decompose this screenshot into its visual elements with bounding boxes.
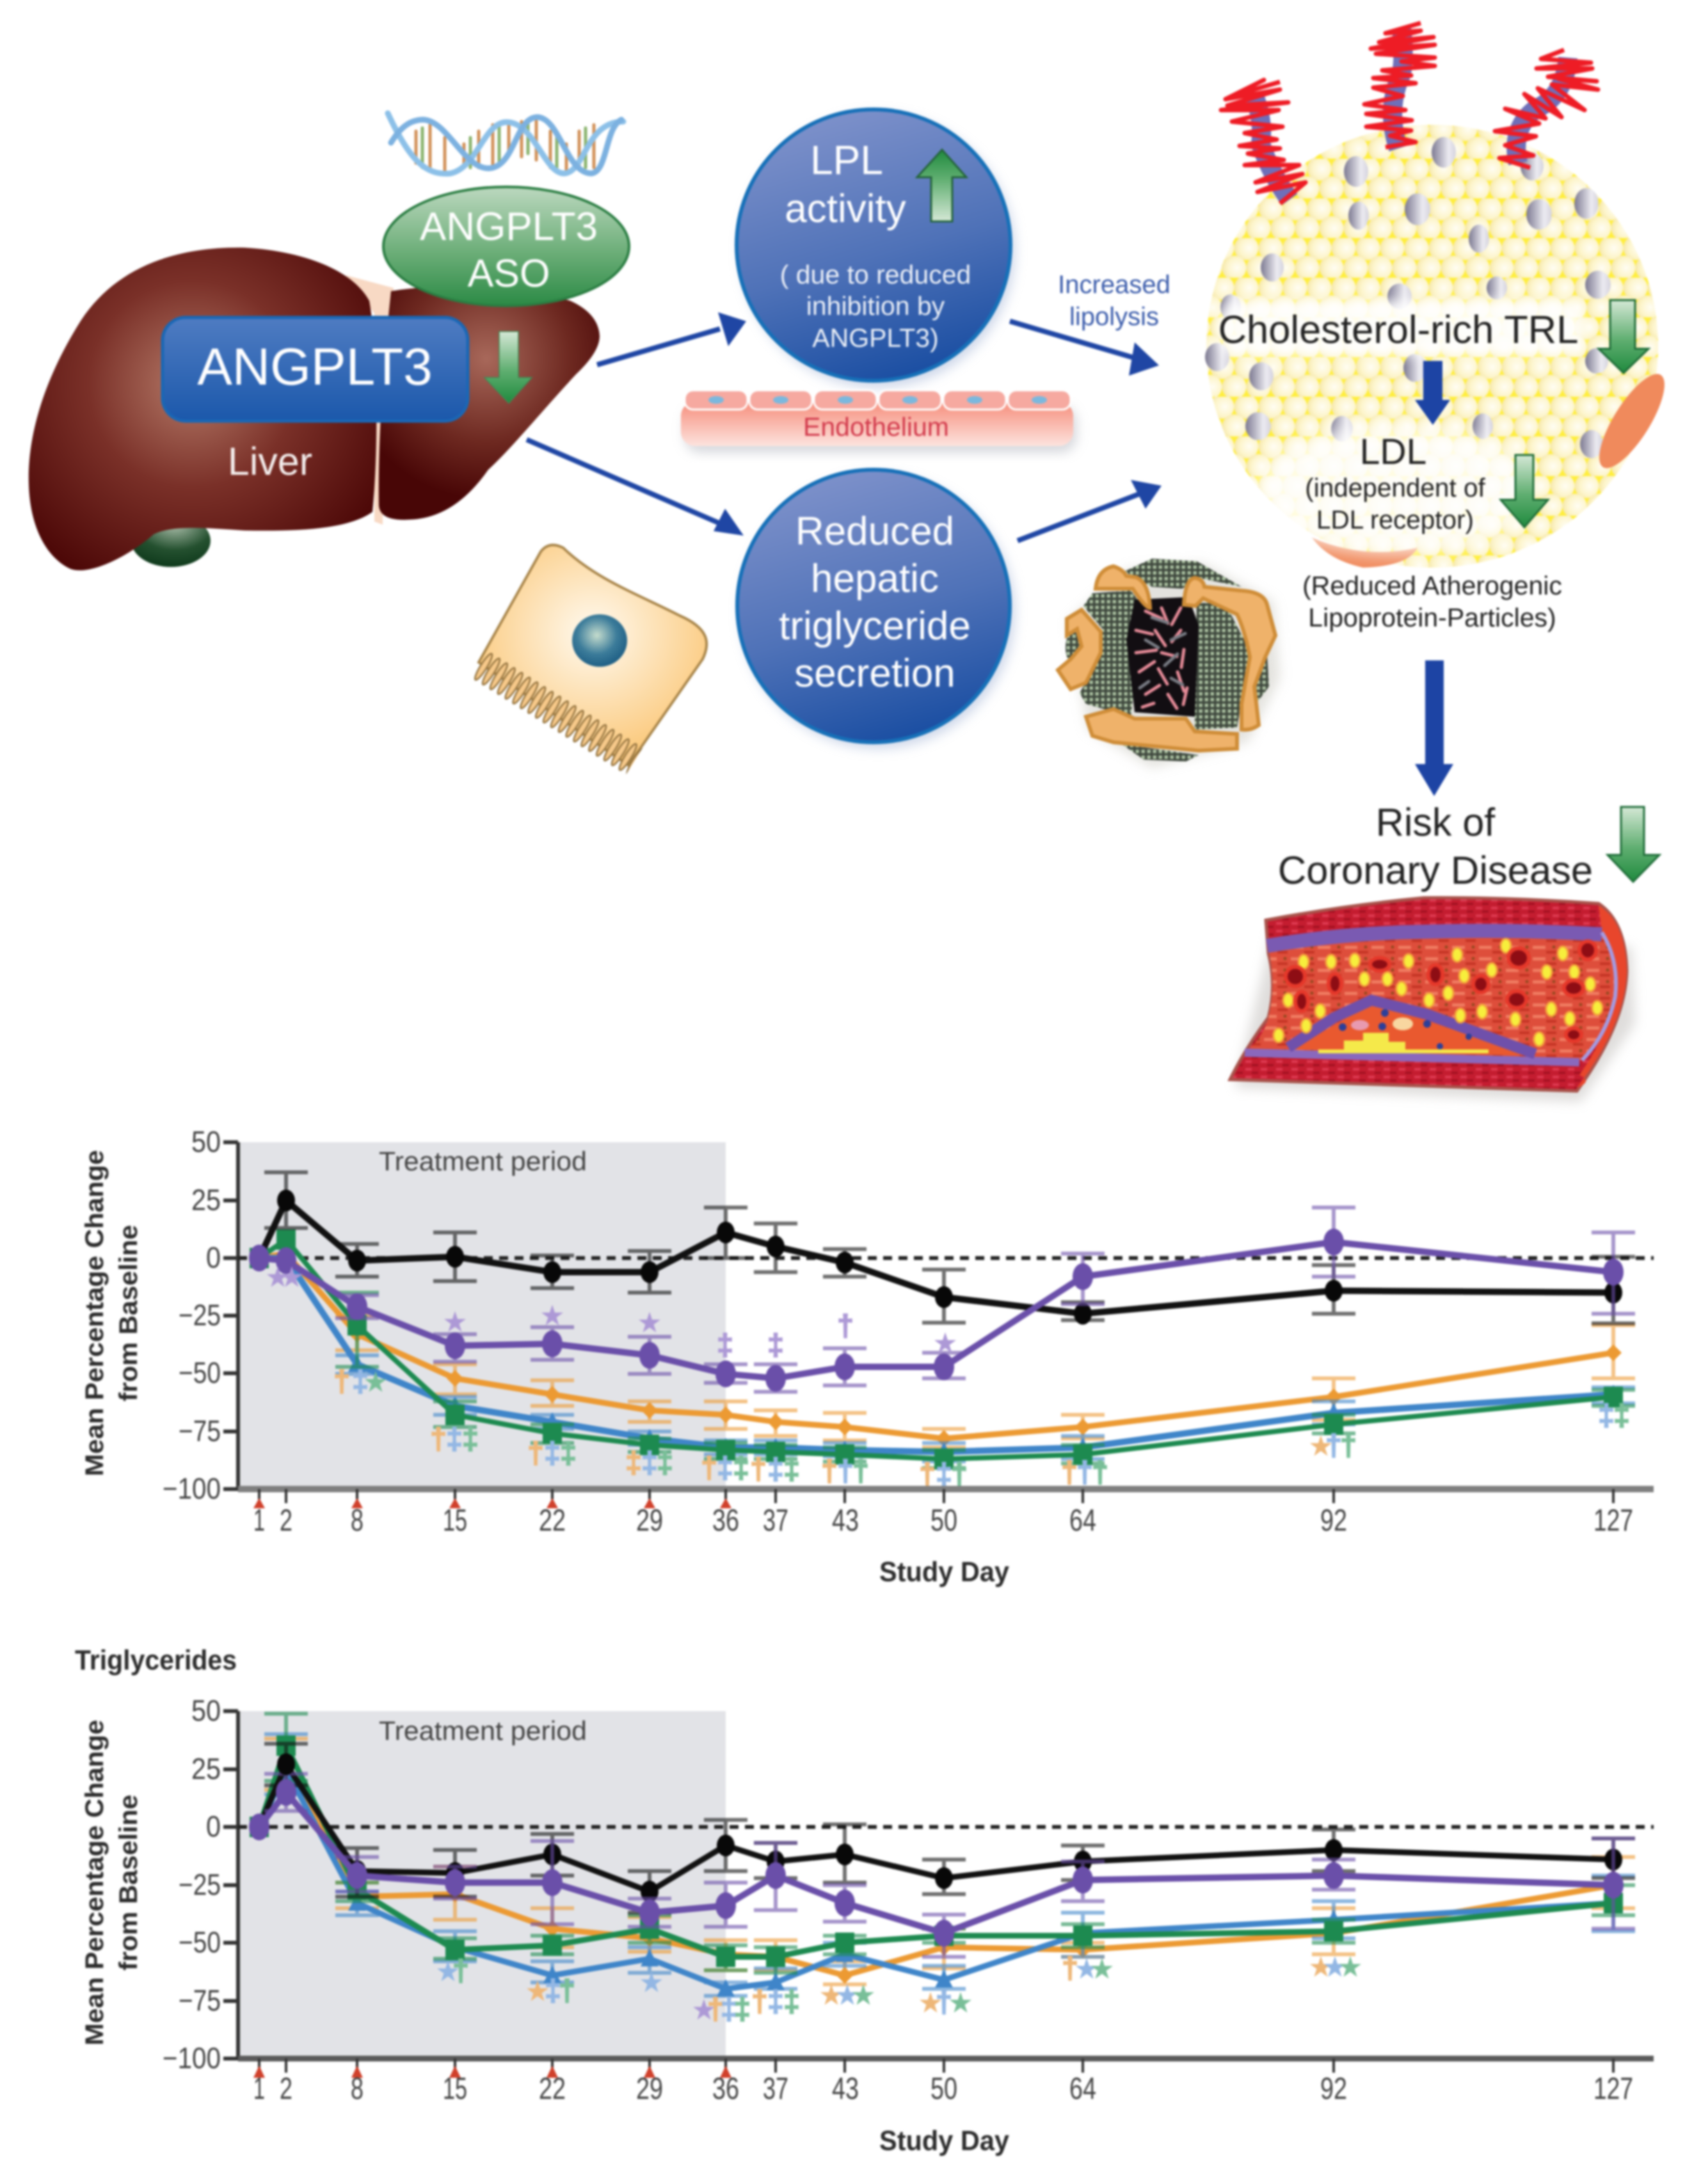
series: green dose bbox=[259, 1239, 1635, 1468]
x axis with day labels: 15 bbox=[443, 1504, 467, 1538]
significance markers: ‡ bbox=[641, 1446, 658, 1479]
circle: LPL activity: activity bbox=[785, 187, 906, 231]
significance markers: ‡ bbox=[783, 1984, 800, 2018]
x axis with day labels: 2 bbox=[280, 2072, 292, 2106]
x axis with day labels: 8 bbox=[351, 2072, 363, 2106]
label: reduced atherogenic particles bbox=[1302, 571, 1562, 632]
x axis with day labels: 127 bbox=[1593, 2072, 1633, 2106]
significance markers: ★ bbox=[922, 1991, 940, 2014]
significance markers: ★ bbox=[446, 1311, 465, 1334]
significance markers: ★ bbox=[854, 1984, 873, 2007]
icon: green arrow LDL down bbox=[1501, 455, 1548, 527]
series: orange dose bbox=[259, 1254, 1635, 1447]
significance markers: ★ bbox=[1341, 1956, 1360, 1979]
significance markers: ‡ bbox=[545, 1973, 561, 2007]
significance markers: ‡ bbox=[733, 1451, 749, 1484]
label: LDL: LDL receptor) bbox=[1316, 505, 1474, 534]
icon: DNA helix bbox=[388, 113, 623, 173]
series: black placebo bbox=[259, 1172, 1635, 1323]
significance markers: ★ bbox=[1093, 1957, 1112, 1981]
label: increased lipolysis: lipolysis bbox=[1069, 303, 1159, 331]
significance markers: ‡ bbox=[767, 1984, 784, 2018]
significance markers: † bbox=[750, 1452, 767, 1485]
label: risk of coronary disease: Risk of bbox=[1376, 801, 1496, 844]
significance markers: ★ bbox=[822, 1984, 841, 2007]
significance markers: ★ bbox=[1078, 1957, 1096, 1981]
icon: green arrow TRL down bbox=[1599, 300, 1649, 373]
significance markers: † bbox=[751, 1984, 768, 2018]
x axis with day labels: 92 bbox=[1320, 2072, 1347, 2106]
significance markers: ‡ bbox=[721, 1992, 737, 2025]
significance markers: † bbox=[852, 1454, 869, 1487]
liver left lobe bbox=[29, 248, 376, 570]
significance markers: † bbox=[701, 1451, 717, 1484]
y axis with ticks: 50 bbox=[191, 1694, 221, 1727]
significance markers: ‡ bbox=[1598, 1398, 1615, 1431]
y axis with ticks: 0 bbox=[206, 1810, 221, 1843]
x axis with day labels: 2 bbox=[280, 1504, 292, 1538]
label: increased lipolysis: Increased bbox=[1058, 271, 1170, 299]
series: blue dose bbox=[259, 1734, 1635, 1996]
ribbon inner helix bbox=[1254, 29, 1568, 200]
y axis with ticks: 25 bbox=[191, 1183, 221, 1216]
y axis title bbox=[81, 1720, 143, 2045]
significance markers: ★ bbox=[1326, 1956, 1345, 1979]
zero reference line bbox=[238, 1256, 1654, 1260]
icon: hepatocyte cell bbox=[471, 545, 707, 775]
circle: LPL activity: inhibition by bbox=[806, 291, 945, 321]
white text glow band bbox=[1219, 301, 1584, 355]
y axis title: Mean Percentage Change bbox=[81, 1720, 109, 2045]
particle core bbox=[1126, 597, 1199, 717]
x axis with day labels bbox=[238, 1489, 1654, 1538]
series: purple dose bbox=[259, 1208, 1635, 1392]
label: increased lipolysis bbox=[1058, 271, 1170, 331]
orange membrane patches bbox=[1588, 365, 1676, 477]
significance markers: ‡ bbox=[734, 1992, 751, 2025]
dosing markers bbox=[253, 2066, 731, 2078]
arrow: secretion to TRL bbox=[1018, 480, 1162, 541]
circle: reduced hepatic triglyceride secretion: secretion bbox=[794, 651, 955, 696]
icon: down arrow in liver bbox=[484, 331, 532, 403]
label: LDL: LDL bbox=[1360, 431, 1426, 472]
artery purple intima bbox=[1267, 931, 1602, 946]
x axis with day labels: 1 bbox=[253, 1504, 265, 1538]
significance markers: ‡ bbox=[936, 1457, 952, 1490]
apolipoprotein ribbons bbox=[1221, 23, 1598, 203]
series: orange dose bbox=[259, 1739, 1635, 1984]
label: reduced atherogenic particles: (Reduced Atherogenic bbox=[1302, 571, 1562, 600]
x axis with day labels: 22 bbox=[539, 2072, 566, 2106]
significance markers: ‡ bbox=[717, 1451, 733, 1484]
x axis with day labels: 36 bbox=[712, 2072, 739, 2106]
endothelium band bbox=[681, 390, 1076, 452]
significance markers: ★ bbox=[1312, 1956, 1330, 1979]
label: Liver: Liver bbox=[228, 440, 312, 483]
series: black placebo bbox=[259, 1744, 1635, 1913]
significance markers: ‡ bbox=[717, 1328, 733, 1361]
significance markers: ★ bbox=[643, 1971, 661, 1994]
x axis with day labels: 22 bbox=[539, 1504, 566, 1538]
significance markers: † bbox=[821, 1454, 838, 1487]
x axis title: Study Day bbox=[879, 1556, 1009, 1588]
significance markers: † bbox=[837, 1309, 854, 1342]
x axis with day labels: 1 bbox=[253, 2072, 265, 2106]
x axis with day labels: 37 bbox=[763, 1504, 788, 1538]
dosing markers bbox=[253, 1498, 731, 1508]
x axis with day labels: 50 bbox=[930, 1504, 957, 1538]
artery outer wall bbox=[1230, 898, 1627, 1091]
significance markers: ‡ bbox=[783, 1452, 800, 1485]
x axis with day labels: 92 bbox=[1320, 1504, 1347, 1538]
significance markers: † bbox=[919, 1457, 936, 1490]
significance markers: ‡ bbox=[352, 1364, 369, 1398]
icon: up arrow bbox=[917, 150, 966, 221]
particle orange membrane bbox=[1058, 566, 1275, 751]
significance markers: † bbox=[559, 1973, 575, 2007]
significance markers: † bbox=[707, 1992, 724, 2025]
panel: mechanism diagram bbox=[29, 23, 1676, 1102]
significance markers: † bbox=[1325, 1428, 1342, 1462]
significance markers: ★ bbox=[367, 1371, 385, 1394]
significance markers: † bbox=[1340, 1428, 1357, 1462]
label: risk of coronary disease: Coronary Disease bbox=[1278, 849, 1593, 893]
zero reference line bbox=[238, 1825, 1654, 1829]
y axis with ticks: 0 bbox=[206, 1241, 221, 1274]
y axis with ticks: −100 bbox=[163, 1472, 221, 1505]
endothelium band: Endothelium bbox=[803, 412, 949, 442]
gray spheres bbox=[1205, 137, 1611, 458]
plaque bbox=[1288, 1000, 1536, 1056]
significance markers: ‡ bbox=[767, 1452, 784, 1485]
y axis title: from Baseline bbox=[115, 1794, 143, 1971]
circle: LPL activity: ANGPLT3) bbox=[812, 323, 939, 353]
significance markers: † bbox=[837, 1454, 854, 1487]
x axis with day labels: 50 bbox=[930, 2072, 957, 2106]
circle: LPL activity: ( due to reduced bbox=[780, 260, 971, 289]
ANGPLT3 box bbox=[163, 317, 468, 421]
significance markers bbox=[439, 1951, 1360, 2025]
y axis with ticks: 25 bbox=[191, 1752, 221, 1785]
circle: LPL activity bbox=[737, 109, 1015, 388]
x axis title: Study Day bbox=[879, 2125, 1009, 2156]
significance markers: ★ bbox=[952, 1991, 970, 2014]
significance markers: ★ bbox=[641, 1311, 659, 1334]
label: risk of coronary disease bbox=[1278, 801, 1593, 893]
label: treatment period: Treatment period bbox=[379, 1146, 587, 1176]
significance markers: ★ bbox=[269, 1266, 287, 1289]
circle: reduced hepatic triglyceride secretion: triglyceride bbox=[779, 604, 971, 648]
marker: black peak at day 2 bbox=[277, 1753, 295, 1775]
significance markers: ‡ bbox=[560, 1436, 577, 1469]
significance markers: † bbox=[1062, 1951, 1078, 1984]
x axis with day labels bbox=[238, 2059, 1654, 2106]
arrow: liver to hepatic secretion bbox=[527, 440, 744, 536]
y axis with ticks: 50 bbox=[191, 1125, 221, 1158]
y axis with ticks: −75 bbox=[179, 1984, 221, 2017]
significance markers: † bbox=[430, 1422, 447, 1455]
heading: triglycerides: Triglycerides bbox=[75, 1645, 237, 1676]
particle body bbox=[1206, 125, 1658, 568]
panel: triglycerides chart bbox=[75, 1645, 1654, 2156]
arrow: to coronary risk bbox=[1415, 660, 1453, 796]
significance markers: † bbox=[1061, 1455, 1078, 1488]
y axis with ticks bbox=[163, 1694, 238, 2075]
icon: green arrow risk down bbox=[1608, 807, 1659, 882]
label: reduced atherogenic particles: Lipoprotein-Particles) bbox=[1308, 603, 1556, 632]
label: LDL bbox=[1305, 431, 1485, 534]
ANGPLT3 ASO ellipse: ASO bbox=[468, 251, 550, 295]
series: green dose bbox=[259, 1714, 1635, 1973]
liver illustration bbox=[29, 248, 600, 570]
ribbon coils bbox=[1221, 23, 1598, 203]
significance markers: ★ bbox=[1312, 1435, 1330, 1458]
arrow: liver to LPL activity bbox=[597, 312, 746, 365]
label: cholesterol-rich TRL: Cholesterol-rich TRL bbox=[1218, 308, 1578, 352]
liver right lobe bbox=[379, 287, 600, 520]
circle: reduced hepatic triglyceride secretion bbox=[737, 470, 1015, 749]
y axis with ticks: −25 bbox=[179, 1298, 221, 1332]
significance markers: † bbox=[333, 1364, 350, 1398]
icon: artery with plaque bbox=[1230, 898, 1635, 1102]
circle: reduced hepatic triglyceride secretion: hepatic bbox=[811, 557, 939, 601]
significance markers bbox=[269, 1266, 1630, 1490]
icon: blue arrow TRL to LDL bbox=[1415, 361, 1450, 425]
circle: reduced hepatic triglyceride secretion: Reduced bbox=[795, 509, 954, 554]
icon: gallbladder bbox=[131, 514, 211, 567]
significance markers: ★ bbox=[936, 1332, 955, 1355]
icon: lipoprotein particle cutaway bbox=[1058, 559, 1280, 768]
x axis with day labels: 43 bbox=[832, 1504, 859, 1538]
significance markers: † bbox=[1092, 1455, 1108, 1488]
x axis with day labels: 15 bbox=[443, 2072, 467, 2106]
panel: cholesterol-rich TRL particle bbox=[1205, 125, 1676, 568]
y axis with ticks: −75 bbox=[179, 1414, 221, 1447]
y axis title: from Baseline bbox=[115, 1225, 143, 1401]
artery end cap bbox=[1577, 905, 1627, 1088]
significance markers: † bbox=[951, 1457, 968, 1490]
yellow lipid dots bbox=[1274, 939, 1602, 1046]
label: LDL: (independent of bbox=[1305, 473, 1485, 502]
y axis with ticks bbox=[163, 1125, 238, 1505]
ANGPLT3 ASO ellipse bbox=[383, 187, 629, 306]
ANGPLT3 ASO ellipse: ANGPLT3 bbox=[420, 205, 598, 249]
significance markers: ‡ bbox=[1613, 1398, 1630, 1431]
significance markers: ‡ bbox=[767, 1328, 784, 1361]
ANGPLT3 box: ANGPLT3 bbox=[197, 338, 433, 396]
y axis title: Mean Percentage Change bbox=[81, 1150, 109, 1476]
x axis with day labels: 8 bbox=[351, 1504, 363, 1538]
significance markers: ★ bbox=[838, 1984, 857, 2007]
x axis with day labels: 29 bbox=[636, 2072, 663, 2106]
series: blue dose bbox=[259, 1258, 1635, 1462]
label: treatment period: Treatment period bbox=[379, 1716, 587, 1746]
x axis with day labels: 29 bbox=[636, 1504, 663, 1538]
significance markers: ‡ bbox=[657, 1446, 673, 1479]
x axis with day labels: 127 bbox=[1593, 1504, 1633, 1538]
particle green lipid regions bbox=[1066, 559, 1269, 761]
series: purple dose bbox=[259, 1774, 1635, 1957]
significance markers: ‡ bbox=[544, 1436, 561, 1469]
significance markers: † bbox=[936, 1985, 952, 2018]
y axis with ticks: −25 bbox=[179, 1868, 221, 1901]
y axis with ticks: −100 bbox=[163, 2041, 221, 2075]
red blood cells bbox=[1286, 941, 1596, 1041]
panel: upper chart bbox=[81, 1125, 1654, 1588]
significance markers: ‡ bbox=[625, 1446, 642, 1479]
significance markers: ‡ bbox=[446, 1422, 463, 1455]
x axis with day labels: 64 bbox=[1069, 2072, 1096, 2106]
significance markers: † bbox=[527, 1436, 544, 1469]
arrow: LPL to TRL bbox=[1010, 321, 1159, 376]
y axis with ticks: −50 bbox=[179, 1925, 221, 1959]
significance markers: ★ bbox=[543, 1304, 562, 1327]
x axis with day labels: 37 bbox=[763, 2072, 788, 2106]
x axis with day labels: 43 bbox=[832, 2072, 859, 2106]
significance markers: ★ bbox=[439, 1960, 458, 1983]
x axis with day labels: 64 bbox=[1069, 1504, 1096, 1538]
significance markers: ★ bbox=[695, 1998, 714, 2021]
significance markers: † bbox=[452, 1954, 469, 1987]
treatment period shading bbox=[238, 1711, 726, 2059]
significance markers: ‡ bbox=[462, 1422, 479, 1455]
significance markers: ★ bbox=[529, 1980, 547, 2003]
significance markers: † bbox=[1076, 1455, 1093, 1488]
y axis with ticks: −50 bbox=[179, 1356, 221, 1389]
treatment period shading bbox=[238, 1142, 726, 1489]
x axis with day labels: 36 bbox=[712, 1504, 739, 1538]
artery lumen bbox=[1245, 931, 1616, 1060]
significance markers: ★ bbox=[283, 1266, 301, 1289]
circle: LPL activity: LPL bbox=[810, 137, 883, 183]
y axis title bbox=[81, 1150, 143, 1476]
